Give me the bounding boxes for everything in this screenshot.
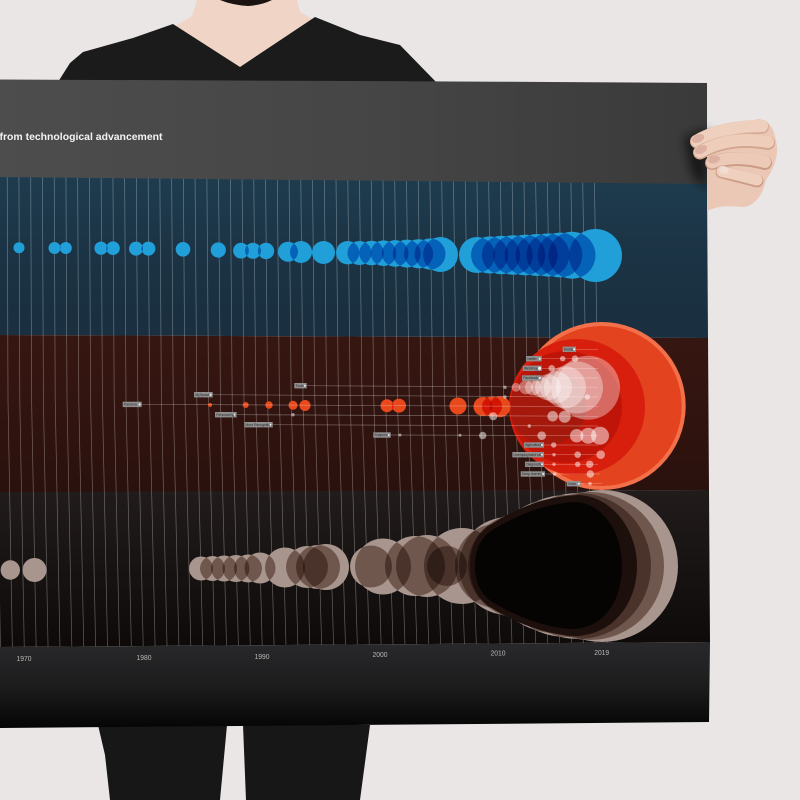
- year axis labels: 2000: [372, 650, 388, 659]
- year grid lines: [0, 170, 607, 650]
- row labels: Facebook: [523, 376, 538, 380]
- title: from technological advancement: [0, 131, 163, 143]
- panel: bottom axis band: [0, 642, 710, 728]
- row labels: Tinder: [296, 384, 306, 388]
- row labels: Deep learning: [522, 472, 543, 476]
- year axis labels: 1990: [254, 652, 270, 661]
- year axis labels: 2010: [490, 648, 506, 658]
- bubble chart: brown series: [1, 490, 678, 642]
- white bubble cluster: [512, 356, 620, 420]
- row labels: Diagnostic: [526, 462, 542, 466]
- row labels: More Recognition: [246, 423, 272, 427]
- year axis labels: 1970: [16, 654, 32, 663]
- person: neck and beard: [172, 0, 318, 72]
- row labels: Social: [564, 348, 573, 352]
- poster sheet: [0, 80, 710, 728]
- year axis labels: [16, 648, 609, 663]
- icon: hand gripping poster: [690, 119, 777, 211]
- panel: brown band: [0, 335, 709, 493]
- row lines of the red chart: [141, 349, 602, 484]
- hand shadow on poster: [684, 128, 707, 190]
- row labels: Personal type: [216, 413, 237, 417]
- red chain of small circles: [208, 396, 510, 417]
- large red circles: [509, 322, 686, 490]
- row labels: Webshop: [524, 366, 538, 370]
- row labels: Pandora: [124, 403, 137, 407]
- small white dots per row: [291, 355, 609, 485]
- bubble chart: blue series: [14, 229, 622, 282]
- row labels: MySpace: [195, 393, 210, 397]
- year axis labels: 2019: [594, 648, 609, 657]
- row labels: Voice: [568, 482, 576, 486]
- bubble chart: red series: [208, 322, 686, 490]
- row labels: Netflix: [527, 357, 537, 361]
- dark rim of the brown series core: [470, 495, 637, 636]
- row labels: Snapchat: [374, 433, 389, 437]
- black core of the brown series: [475, 502, 622, 629]
- row labels: Unemployment rate: [514, 453, 543, 457]
- row labels: [123, 347, 581, 486]
- panel: blue band: [0, 177, 708, 338]
- person: black t-shirt: [58, 17, 438, 84]
- year axis labels: 1980: [136, 653, 152, 662]
- panel: dark band: [0, 490, 710, 647]
- person: trouser legs: [98, 725, 370, 800]
- row labels: Agricultural: [525, 443, 542, 447]
- panel: top header band: [0, 80, 707, 185]
